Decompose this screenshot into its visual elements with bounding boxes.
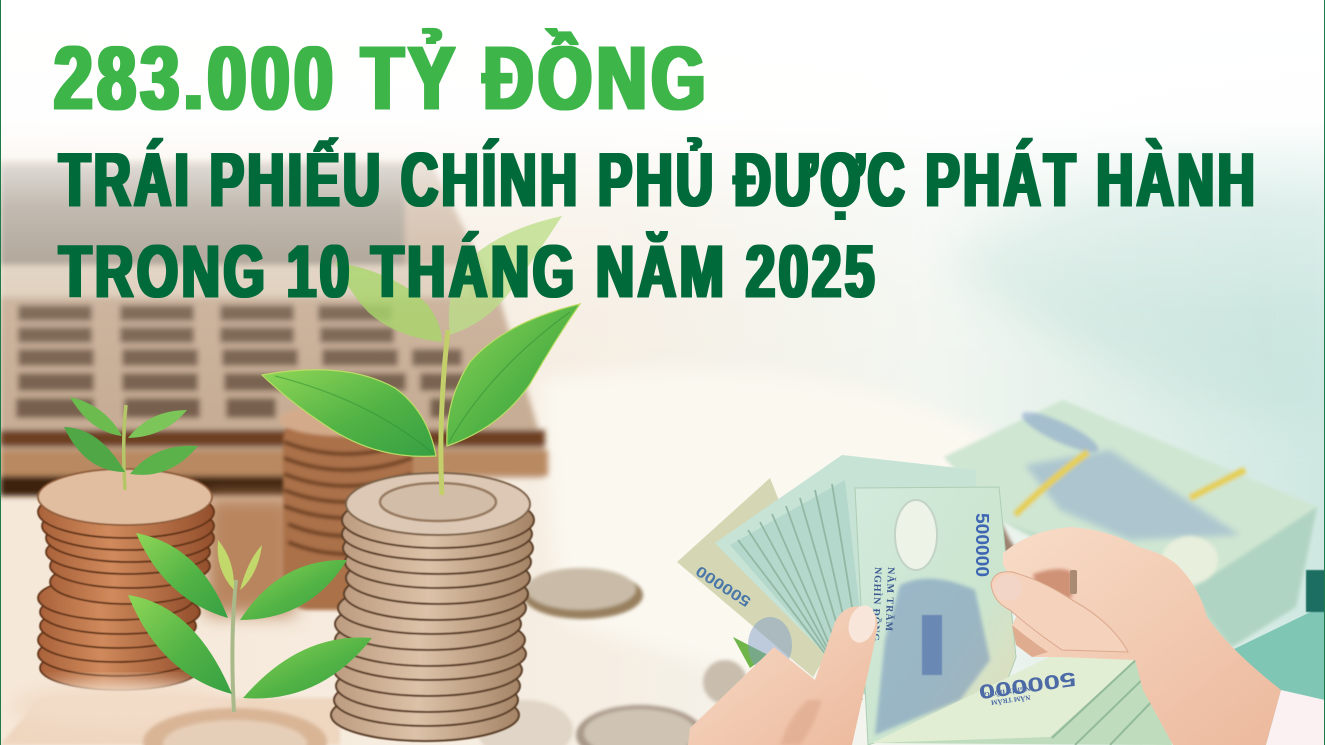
banknote text [693, 513, 992, 642]
title line 3: TRONG 10 THÁNG NĂM 2025 [59, 230, 878, 313]
right hand [991, 527, 1281, 745]
banknote text: 500000 [693, 562, 754, 610]
small plant lower left [128, 533, 372, 712]
title line 1: 283.000 TỶ ĐỒNG [54, 27, 710, 129]
money stack bottom: NĂM TRĂM [990, 693, 1031, 707]
left stack bottom fade [10, 682, 240, 730]
money stack bottom [872, 655, 1172, 745]
fanned banknotes in hand [677, 455, 1016, 745]
back coin stack [279, 404, 413, 610]
front coin stack [331, 473, 534, 741]
banknote text: NGHÌN ĐỒNG [869, 567, 885, 642]
money stack bottom: 500000 [977, 667, 1077, 702]
money stack bottom: NGHÌN ĐỒNG [983, 684, 1031, 698]
blurred calculator [0, 160, 548, 496]
left edge line [0, 0, 1, 745]
banknote text: 500000 [972, 513, 992, 577]
scattered coins [0, 568, 747, 745]
right edge line [1324, 0, 1325, 745]
blurred brown area between stacks [205, 495, 295, 615]
small plant top left [64, 397, 198, 490]
left hand [688, 602, 879, 745]
banknote text: NĂM TRĂM [883, 567, 897, 632]
small leaf behind money [733, 637, 768, 668]
big plant with leaves [262, 216, 580, 495]
left coin stack [38, 469, 214, 690]
money bundle back [944, 400, 1317, 647]
small coin under lower plant [143, 708, 327, 745]
shirt cuff [1266, 690, 1325, 745]
